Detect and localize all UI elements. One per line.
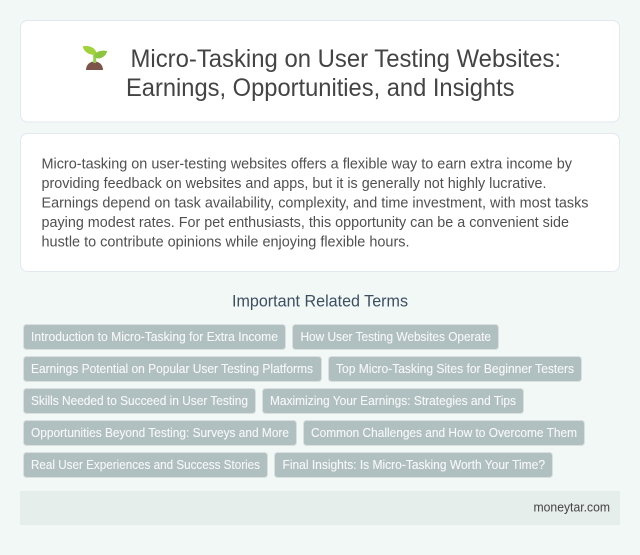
heading: related terms: Important Related Terms <box>232 293 408 311</box>
tag <box>24 356 322 382</box>
title <box>126 46 561 102</box>
tag: Real User Experiences and Success Stories <box>31 457 260 472</box>
description text: Earnings depend on task availability, complexity, and time investment, with most tasks <box>42 195 588 211</box>
icon: seedling <box>83 46 107 70</box>
tag: Maximizing Your Earnings: Strategies and Tips <box>270 393 516 408</box>
description text: hustle to contribute opinions while enjoying flexible hours. <box>42 234 410 250</box>
header panel <box>20 20 620 122</box>
title: Earnings, Opportunities, and Insights <box>126 75 514 102</box>
footer bar <box>20 491 620 525</box>
description text <box>42 156 588 250</box>
tag <box>262 388 524 414</box>
tag <box>304 420 584 446</box>
tag <box>292 324 498 350</box>
tag: Introduction to Micro-Tasking for Extra Income <box>31 329 278 344</box>
tag: Top Micro-Tasking Sites for Beginner Testers <box>336 361 574 376</box>
title: Micro-Tasking on User Testing Websites: <box>130 46 561 73</box>
tag <box>24 324 286 350</box>
description text: providing feedback on websites and apps, but it is generally not highly lucrative. <box>42 176 546 192</box>
description text: paying modest rates. For pet enthusiasts, this opportunity can be a convenient side <box>42 215 569 231</box>
description text: Micro-tasking on user-testing websites offers a flexible way to earn extra income by <box>42 156 573 172</box>
tag: Common Challenges and How to Overcome Them <box>311 425 577 440</box>
panel: description <box>20 134 620 272</box>
tag: Skills Needed to Succeed in User Testing <box>31 393 248 408</box>
tag: How User Testing Websites Operate <box>300 329 491 344</box>
tag <box>24 420 296 446</box>
tag: Opportunities Beyond Testing: Surveys and More <box>31 425 289 440</box>
tag <box>274 452 552 478</box>
tag: Final Insights: Is Micro-Tasking Worth Your Time? <box>282 457 545 472</box>
footer source text: moneytar.com <box>534 500 610 515</box>
tag list <box>24 324 584 478</box>
tag <box>328 356 582 382</box>
tag <box>24 452 268 478</box>
tag <box>24 388 256 414</box>
tag: Earnings Potential on Popular User Testing Platforms <box>31 361 313 376</box>
